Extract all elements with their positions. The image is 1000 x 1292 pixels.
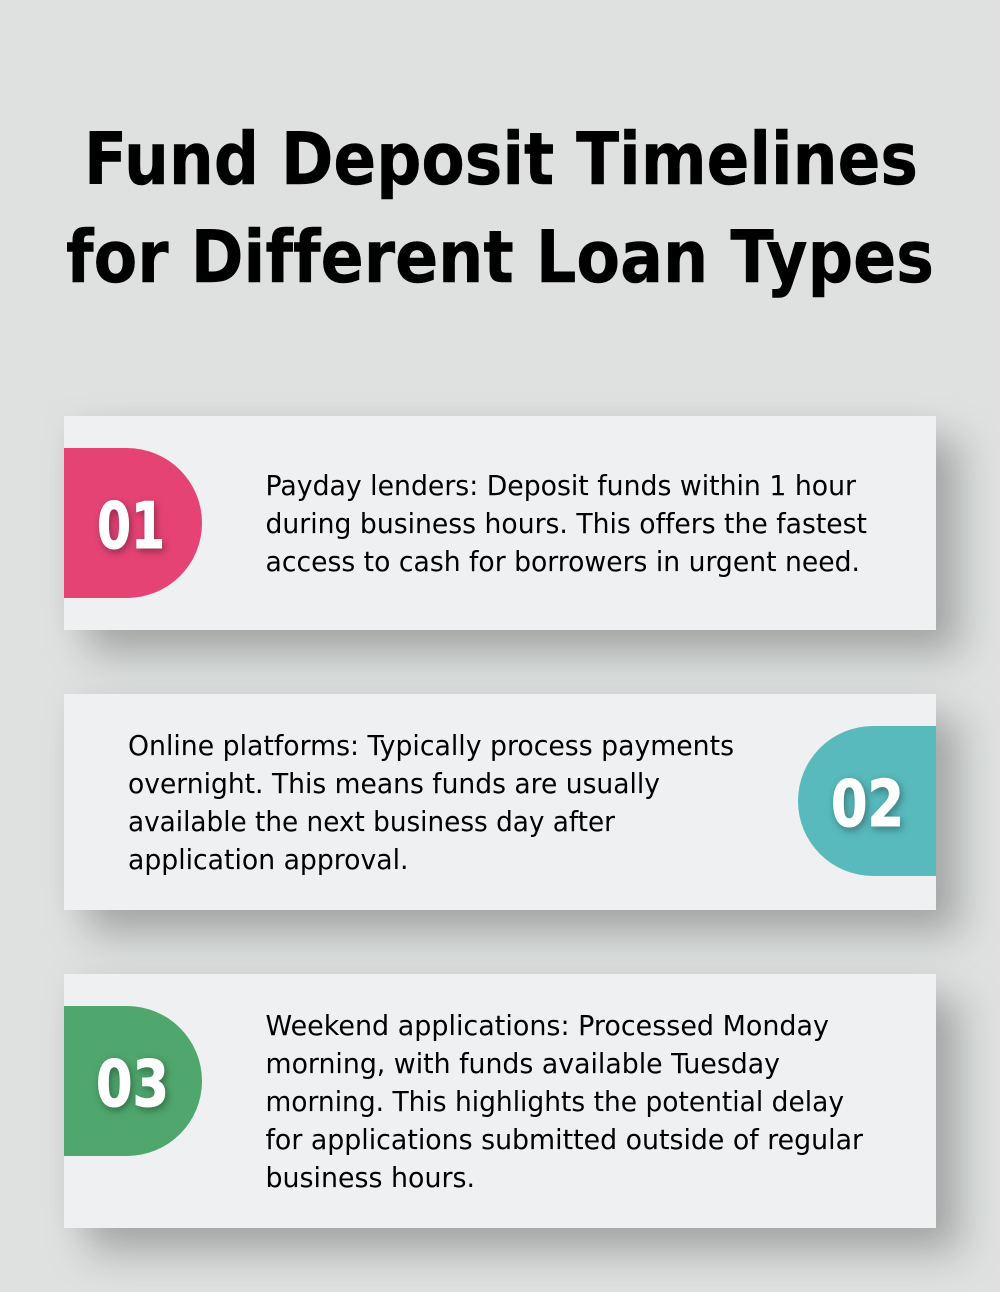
text: payday lenders description [266,470,867,578]
text: weekend applications description: business hours. [266,1162,475,1194]
badge: 02: 02 [831,768,904,842]
text: weekend applications description: for applications submitted outside of regular [266,1124,864,1156]
text: weekend applications description: Weekend applications: Processed Monday [266,1010,829,1042]
panel: online platforms [64,694,936,910]
panel: payday lenders [64,416,936,630]
text: payday lenders description: Payday lenders: Deposit funds within 1 hour [266,470,857,502]
text: weekend applications description [266,1010,864,1194]
text: online platforms description: application approval. [128,844,408,876]
text: payday lenders description: access to cash for borrowers in urgent need. [266,546,860,578]
text: online platforms description: Online platforms: Typically process payments [128,730,734,762]
text: weekend applications description: morning. This highlights the potential delay [266,1086,844,1118]
title [66,117,934,299]
text: online platforms description: available the next business day after [128,806,616,838]
badge: 01: 01 [97,490,165,564]
panel: weekend applications [64,974,936,1228]
badge: 02 [798,726,936,876]
text: online platforms description [128,730,734,876]
text: payday lenders description: during business hours. This offers the fastest [266,508,867,540]
badge: 03 [64,1006,202,1156]
text: online platforms description: overnight. This means funds are usually [128,768,660,800]
badge: 03: 03 [96,1048,169,1122]
badge: 01 [64,448,202,598]
text: weekend applications description: morning, with funds available Tuesday [266,1048,780,1080]
